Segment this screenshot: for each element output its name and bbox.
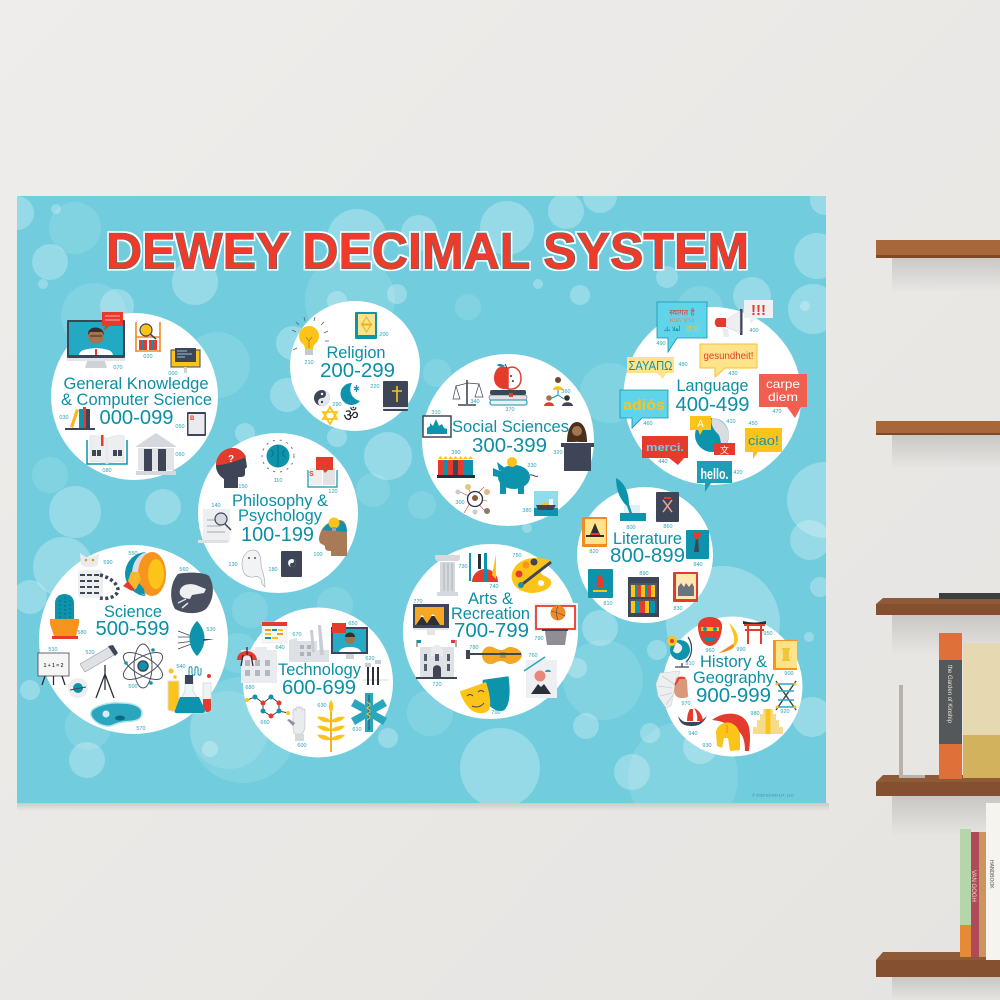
icon: network people 360: 360 bbox=[561, 389, 571, 395]
icon: caduceus 610 bbox=[351, 693, 387, 733]
icon: books 030 bbox=[59, 407, 95, 430]
icon: star of David bbox=[323, 407, 337, 424]
panel: Technology bbox=[237, 608, 393, 758]
icon: art tools 740 bbox=[469, 552, 500, 590]
icon: head with bulb 100: 100 bbox=[313, 552, 323, 558]
icon: chief headdress 970 bbox=[656, 671, 691, 708]
icon: viking ship 940 bbox=[678, 708, 707, 737]
icon: DNA 920: 920 bbox=[780, 709, 790, 715]
heading: Science: Science bbox=[104, 603, 162, 621]
icon: step pyramid 980 bbox=[750, 709, 783, 734]
icon: boomerang 990: 990 bbox=[736, 647, 746, 653]
icon: tribal mask 960: 960 bbox=[705, 648, 715, 654]
icon: light bulb 210: 210 bbox=[304, 360, 314, 366]
speech bubble: ciao 450 bbox=[745, 421, 782, 459]
icon: scales 340: 340 bbox=[470, 399, 480, 405]
speech bubble: hello 420: hello. bbox=[700, 466, 728, 483]
icon: dark book 860 bbox=[656, 492, 679, 530]
icon: lemur 590: 590 bbox=[103, 560, 113, 566]
icon: globe with translation 410: A bbox=[697, 419, 704, 430]
heading: Literature: Literature bbox=[613, 530, 682, 548]
speech bubble: carpe diem 470: carpe bbox=[766, 377, 800, 391]
heading: Religion: Religion bbox=[326, 344, 386, 362]
icon: castle book 830: 830 bbox=[673, 606, 683, 612]
speech bubble: carpe diem 470 bbox=[759, 374, 807, 418]
heading: Literature: 800-899 bbox=[610, 544, 685, 567]
speech bubble: Greek 480: ΣΑΥΑΠΩ bbox=[628, 358, 673, 373]
icon: lens 530: 530 bbox=[206, 627, 216, 633]
icon: fossil 560 bbox=[171, 567, 213, 613]
icon: Eiffel book 840 bbox=[686, 530, 709, 568]
icon: blackboard 510: 510 bbox=[48, 647, 58, 653]
icon: network people 360 bbox=[544, 377, 573, 406]
icon: blackboard 510 bbox=[38, 647, 69, 685]
heading: Technology bbox=[278, 661, 362, 699]
heading: General Knowledge: General Knowledge bbox=[64, 375, 208, 393]
heading: Arts & Recreation bbox=[451, 590, 530, 642]
icon: bookcase 890 bbox=[628, 571, 659, 617]
icon: brain 110: 110 bbox=[274, 478, 282, 484]
icon: cactus 580 bbox=[50, 594, 87, 639]
heading: Religion bbox=[320, 344, 395, 382]
copyright: © 2022 ECHO-LIT, LLC bbox=[752, 792, 794, 798]
icon: apple on books 370 bbox=[489, 364, 527, 413]
speech bubble: carpe diem 470: diem bbox=[768, 390, 798, 404]
icon: sliders 620: 620 bbox=[365, 656, 375, 662]
icon: microbe 570: 570 bbox=[136, 726, 146, 732]
panel: Arts & Recreation bbox=[403, 544, 578, 719]
speech bubble: ciao 450: 450 bbox=[748, 421, 758, 427]
icon: document magnifier 140 bbox=[198, 503, 231, 543]
speech bubble: exclamation 400: !!! bbox=[751, 302, 766, 319]
heading: Language: 400-499 bbox=[676, 393, 750, 416]
icon: crescent and star 290: 290 bbox=[332, 402, 342, 408]
icon: basketball hoop 790: 790 bbox=[534, 636, 544, 642]
icon: tablet 050: 050 bbox=[175, 424, 185, 430]
icon: picture monitor 770 bbox=[413, 599, 449, 635]
heading: Literature bbox=[610, 530, 685, 567]
heading: Philosophy & Psychology bbox=[232, 492, 328, 546]
heading: Social Sciences: 300-399 bbox=[472, 434, 547, 457]
icon: head question 150 bbox=[216, 448, 248, 490]
icon: boomerang 990 bbox=[719, 623, 746, 653]
heading: Arts & Recreation: Arts & bbox=[468, 590, 513, 608]
panel: History & Geography bbox=[656, 616, 802, 756]
panel: Language bbox=[620, 300, 807, 492]
icon: open book 080: 080 bbox=[102, 468, 112, 474]
icon: bookcase 890: 890 bbox=[639, 571, 649, 577]
icon: chief headdress 970: 970 bbox=[681, 701, 691, 707]
icon: monitor person 650: 650 bbox=[348, 621, 358, 627]
icon: microbe 570 bbox=[91, 703, 146, 732]
icon: column 730: 730 bbox=[458, 564, 468, 570]
icon: social network 300 bbox=[455, 484, 490, 514]
icon: telescope and planet 520: 520 bbox=[85, 650, 95, 656]
icon: basketball hoop 790 bbox=[534, 603, 578, 645]
icon: yin yang bbox=[314, 390, 330, 406]
icon: telescope and planet 520 bbox=[68, 645, 118, 698]
icon: books 030: 030 bbox=[59, 415, 69, 421]
icon: building and compass 680: 680 bbox=[245, 685, 255, 691]
icon: helmet 930: 930 bbox=[702, 743, 712, 749]
icon: column book 900 bbox=[773, 640, 797, 677]
heading: Social Sciences bbox=[452, 418, 569, 457]
icon: bookshelf 020 bbox=[136, 322, 160, 360]
heading: General Knowledge bbox=[61, 375, 212, 429]
bright bokeh bubbles bbox=[0, 179, 863, 808]
icon: factory 670: 670 bbox=[292, 632, 302, 638]
icon: factory 670 bbox=[289, 625, 329, 662]
icon: brain 110 bbox=[262, 440, 294, 484]
heading: Philosophy & Psychology: Philosophy & bbox=[232, 492, 328, 510]
icon: picture monitor 770: 770 bbox=[413, 599, 423, 605]
icon: tribal mask 960 bbox=[698, 617, 722, 654]
icon: scales 340 bbox=[453, 380, 483, 405]
speech bubble: Greek 480: 480 bbox=[678, 362, 688, 368]
wooden shelves with books: HANDBOOK bbox=[988, 860, 994, 889]
icon: palette 750: 750 bbox=[512, 553, 522, 559]
icon: piggy bank 330 bbox=[493, 457, 538, 494]
icon: Eiffel book 840: 840 bbox=[693, 562, 703, 568]
icon: robot hand 600: 600 bbox=[297, 743, 307, 749]
speech bubble: hello 420: 420 bbox=[733, 470, 743, 476]
speech bubble: ciao 450: ciao! bbox=[748, 433, 779, 448]
icon: podium speaker 320 bbox=[553, 422, 594, 471]
poster background bbox=[17, 196, 826, 803]
heading: General Knowledge: & Computer Science bbox=[61, 391, 212, 409]
icon: social network 300: 300 bbox=[455, 500, 465, 506]
heading: Technology: 600-699 bbox=[282, 676, 356, 699]
speech bubble: hello 420 bbox=[697, 461, 743, 492]
icon: head question 150: ? bbox=[228, 454, 234, 465]
icon: document magnifier 140: 140 bbox=[211, 503, 221, 509]
icon: palette 750 bbox=[512, 553, 551, 593]
icon: dark book 860: 860 bbox=[663, 524, 673, 530]
heading: Philosophy & Psychology: Psychology bbox=[238, 507, 323, 525]
icon: theatre masks 700 bbox=[460, 676, 513, 716]
icon: step pyramid 980: 980 bbox=[750, 711, 760, 717]
icon: cargo ship 380 bbox=[522, 491, 558, 516]
speech bubble: welcome 490: स्वागत है bbox=[669, 307, 695, 317]
heading: General Knowledge: 000-099 bbox=[100, 406, 174, 429]
icon: quill and ink 800: 800 bbox=[626, 525, 636, 531]
heading: Technology: Technology bbox=[278, 661, 362, 679]
panel: Philosophy & Psychology bbox=[198, 433, 358, 593]
icon: museum 060: 060 bbox=[175, 452, 185, 458]
icon: yin yang book 180 bbox=[268, 551, 302, 577]
icon: DNA 920 bbox=[776, 681, 796, 715]
icon: column 730 bbox=[435, 555, 468, 596]
heading: Language: Language bbox=[676, 377, 748, 395]
heading: Religion: 200-299 bbox=[320, 359, 395, 382]
speech bubble: Greek 480 bbox=[627, 357, 688, 379]
icon: art print 760: 760 bbox=[528, 653, 538, 659]
speech bubble: exclamation 400 bbox=[744, 300, 773, 334]
speech bubble: carpe diem 470: 470 bbox=[772, 409, 782, 415]
icon: bookshelf 020: 020 bbox=[143, 354, 153, 360]
icon: tablet 050: B bbox=[190, 416, 195, 422]
panel: Social Sciences bbox=[422, 354, 594, 526]
wooden shelves with books bbox=[876, 240, 1000, 1000]
speech bubble: exclamation 400: 400 bbox=[749, 328, 759, 334]
heading: History & Geography: History & bbox=[700, 653, 767, 671]
icon: apple on books 370: 370 bbox=[505, 407, 515, 413]
icon: building and compass 680 bbox=[237, 647, 277, 691]
wooden shelves with books: VAN GOGH bbox=[970, 870, 976, 902]
icon: earth core and crystals 550 bbox=[123, 551, 166, 596]
icon: globe 910: 910 bbox=[685, 661, 695, 667]
icon: lens 530 bbox=[178, 621, 216, 656]
speech bubble: merci 440: 440 bbox=[658, 459, 668, 465]
icon: column book 900: 900 bbox=[784, 671, 794, 677]
icon: chart 310: 310 bbox=[431, 410, 441, 416]
icon: art tools 740: 740 bbox=[489, 584, 499, 590]
icon: candles 390: 390 bbox=[451, 450, 461, 456]
icon: art print 760 bbox=[524, 653, 557, 698]
speech bubble: welcome 490: 490 bbox=[656, 341, 666, 347]
icon: head question 150: 150 bbox=[238, 484, 248, 490]
icon: globe with translation 410 bbox=[690, 416, 736, 456]
icon: wheat 630 bbox=[317, 700, 345, 752]
speech bubble: adios 460: adiós bbox=[623, 397, 665, 414]
icon: mansion 720 bbox=[416, 640, 457, 688]
icon: helmet 930 bbox=[702, 714, 750, 751]
icon: tablet 050 bbox=[175, 412, 206, 436]
speech bubble: welcome 490 bbox=[656, 302, 707, 352]
heading: Language bbox=[676, 377, 750, 416]
icon: rocket book 810: 810 bbox=[603, 601, 613, 607]
icon: torii gate 950 bbox=[743, 621, 773, 644]
icon: monitor person 650 bbox=[331, 621, 368, 659]
heading: Philosophy & Psychology: 100-199 bbox=[241, 523, 314, 546]
icon: torii gate 950: 950 bbox=[763, 631, 773, 637]
icon: megaphone bbox=[715, 309, 742, 337]
icon: calendar 640: 640 bbox=[275, 645, 285, 651]
speech bubble: welcome 490: 欢迎 bbox=[686, 324, 700, 333]
speech bubble: welcome 490: أهلا بك bbox=[664, 324, 681, 333]
icon: piggy bank 330: 330 bbox=[527, 463, 537, 469]
icon: wheat 630: 630 bbox=[317, 703, 327, 709]
icon: flasks 540 bbox=[168, 664, 211, 713]
panel: Religion bbox=[290, 301, 420, 431]
icon: book and speech 120 bbox=[308, 457, 338, 495]
icon: yin yang book 180: 180 bbox=[268, 567, 278, 573]
icon: book and speech 120: 120 bbox=[328, 489, 338, 495]
icon: ghost 130 bbox=[228, 550, 265, 587]
icon: om symbol: ॐ bbox=[343, 406, 359, 425]
icon: castle book 830 bbox=[673, 572, 698, 612]
icon: violin 780: 780 bbox=[469, 645, 479, 651]
icon: violin 780 bbox=[466, 645, 522, 664]
speech bubble: gesundheit 430 bbox=[700, 344, 757, 377]
icon: open book 080 bbox=[87, 435, 127, 474]
speech bubble: merci 440 bbox=[642, 436, 688, 465]
heading: History & Geography: Geography bbox=[693, 669, 775, 687]
icon: quill and ink 800 bbox=[616, 478, 646, 531]
icon: globe with translation 410: 410 bbox=[726, 419, 736, 425]
icon: ghost 130: 130 bbox=[228, 562, 238, 568]
icon: flasks 540: 540 bbox=[176, 664, 186, 670]
icon: globe 910 bbox=[667, 636, 695, 667]
icon: theatre masks 700: 700 bbox=[491, 710, 501, 716]
heading: Arts & Recreation: 700-799 bbox=[454, 619, 529, 642]
icon: witch hat book 820: 820 bbox=[589, 549, 599, 555]
icon: laptop code 000 bbox=[168, 348, 200, 377]
poster shadow bbox=[17, 803, 829, 811]
icon: atom 500 bbox=[119, 644, 167, 690]
title: DEWEY DECIMAL SYSTEM bbox=[106, 222, 749, 280]
speech bubble: merci 440: merci. bbox=[646, 442, 684, 454]
wooden shelves with books: the Garden of Kinship bbox=[946, 665, 952, 724]
speech bubble: gesundheit 430: 430 bbox=[728, 371, 738, 377]
icon: mansion 720: 720 bbox=[432, 682, 442, 688]
icon: fossil 560: 560 bbox=[179, 567, 189, 573]
icon: cargo ship 380: 380 bbox=[522, 508, 532, 514]
icon: molecule 660: 660 bbox=[260, 720, 270, 726]
icon: blackboard 510: 1 + 1 = 2 bbox=[44, 663, 64, 669]
icon: caduceus 610: 610 bbox=[352, 727, 362, 733]
icon: molecule 660 bbox=[245, 694, 290, 726]
icon: atom 500: 500 bbox=[128, 684, 138, 690]
heading: History & Geography: 900-999 bbox=[696, 684, 771, 707]
heading: Arts & Recreation: Recreation bbox=[451, 605, 530, 623]
heading: History & Geography bbox=[693, 653, 775, 707]
icon: bible 220: 220 bbox=[370, 384, 380, 390]
icon: chart 310 bbox=[423, 410, 451, 437]
icon: star book 200: 200 bbox=[379, 332, 389, 338]
icon: earth core and crystals 550: 550 bbox=[128, 551, 138, 557]
icon: laptop code 000: 000 bbox=[168, 371, 178, 377]
heading: Science: 500-599 bbox=[96, 617, 170, 640]
panel: Science bbox=[38, 545, 228, 734]
icon: cactus 580: 580 bbox=[77, 630, 87, 636]
speech bubble: adios 460: 460 bbox=[643, 421, 653, 427]
icon: viking ship 940: 940 bbox=[688, 731, 698, 737]
speech bubble: gesundheit 430: gesundheit! bbox=[704, 351, 754, 362]
icon: podium speaker 320: 320 bbox=[553, 450, 563, 456]
icon: head with bulb 100 bbox=[313, 518, 347, 558]
icon: sliders 620 bbox=[363, 656, 388, 685]
icon: witch hat book 820 bbox=[582, 517, 607, 555]
icon: globe with translation 410: 文 bbox=[720, 444, 729, 456]
icon: robot hand 600 bbox=[287, 707, 307, 749]
icon: rocket book 810 bbox=[588, 569, 613, 607]
speech bubble: welcome 490: ברוך הבא bbox=[670, 318, 695, 324]
heading: Science bbox=[96, 603, 170, 640]
heading: Social Sciences: Social Sciences bbox=[452, 418, 569, 436]
panel: General Knowledge & Computer Science bbox=[51, 312, 218, 480]
icon: video monitor 070: 070 bbox=[113, 365, 123, 371]
icon: museum 060 bbox=[135, 433, 185, 475]
speech bubble: adios 460 bbox=[620, 390, 668, 428]
icon: calendar 640 bbox=[262, 622, 287, 651]
panel: Literature bbox=[577, 478, 713, 623]
icon: video monitor 070 bbox=[67, 312, 125, 371]
icon: book and speech 120: S bbox=[309, 471, 314, 478]
faint large bokeh bubbles bbox=[32, 202, 738, 832]
icon: lemur 590 bbox=[78, 553, 118, 598]
icon: candles 390 bbox=[437, 450, 475, 478]
